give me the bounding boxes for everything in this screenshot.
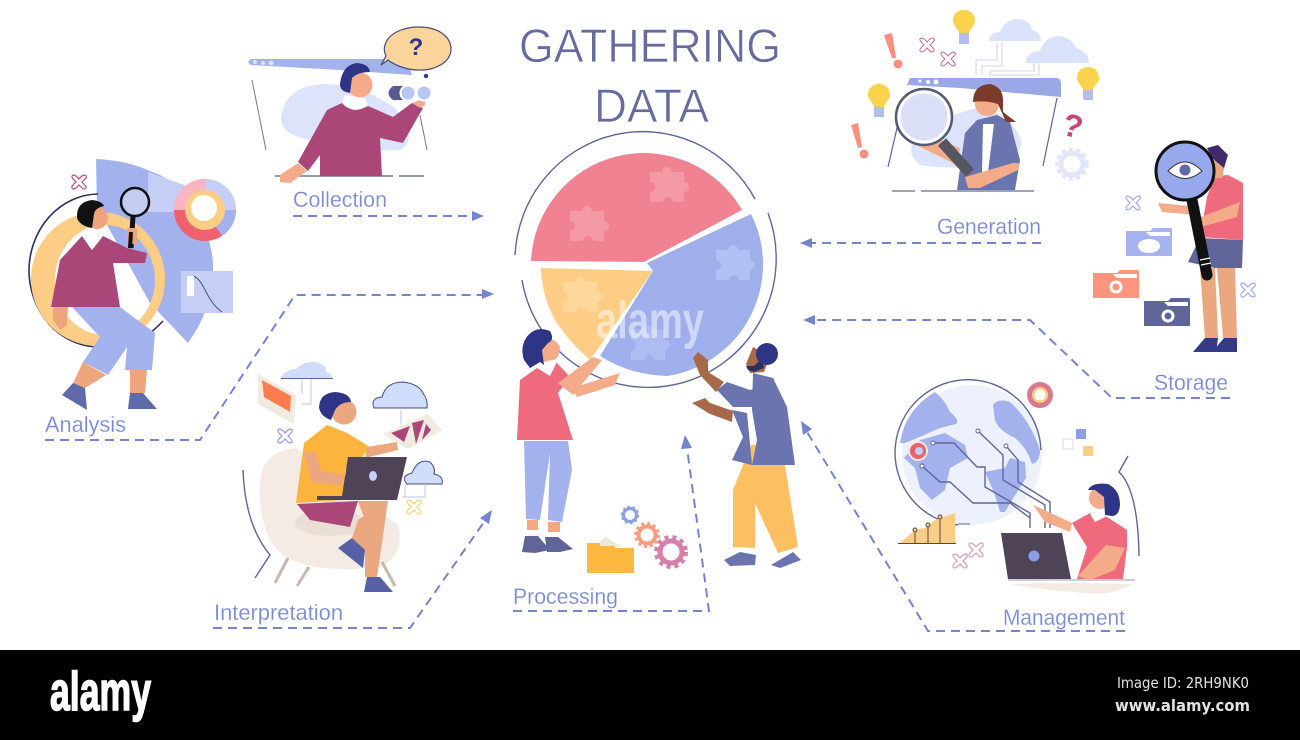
label: Analysis: Analysis xyxy=(45,412,126,437)
label: Collection: Collection xyxy=(293,187,387,212)
watermark: alamy xyxy=(596,292,704,350)
trousers xyxy=(733,443,798,553)
donut xyxy=(174,179,236,241)
ring outline xyxy=(29,194,163,347)
pie slice: red xyxy=(531,153,742,262)
figure: woman holding pie xyxy=(517,329,620,553)
panel: storage xyxy=(1093,142,1255,352)
lightbulbs xyxy=(868,10,1099,117)
puzzle pieces xyxy=(563,167,755,360)
clouds xyxy=(989,19,1041,41)
title xyxy=(519,19,781,132)
title: GATHERING xyxy=(519,19,781,72)
t-shirt xyxy=(296,425,370,503)
legs xyxy=(1200,268,1237,338)
arrow: Analysis xyxy=(45,289,494,440)
head xyxy=(332,400,356,424)
small chart panel xyxy=(181,271,233,313)
label: Generation: Generation xyxy=(937,214,1041,239)
jacket sleeve xyxy=(717,382,775,407)
head xyxy=(536,337,560,362)
floating maps xyxy=(258,374,296,424)
jacket left panel xyxy=(732,410,752,465)
figure: man holding pie xyxy=(692,343,801,568)
footer url: www.alamy.com xyxy=(1115,696,1250,715)
label: Processing: Processing xyxy=(513,584,618,609)
panel: collection: ? xyxy=(409,34,423,61)
table xyxy=(1008,579,1135,581)
browser bar xyxy=(248,59,412,75)
title: DATA xyxy=(594,79,710,132)
arrow: Interpretation xyxy=(213,510,492,628)
legs xyxy=(73,362,147,393)
squares xyxy=(1076,429,1086,439)
binoculars xyxy=(388,86,408,100)
footer band xyxy=(0,650,1300,740)
jacket right panel xyxy=(752,373,795,465)
blob xyxy=(281,84,409,150)
label: Storage: Storage xyxy=(1154,370,1228,395)
armchair xyxy=(260,448,400,569)
magnifier xyxy=(1192,200,1207,275)
arms xyxy=(558,357,602,395)
sweater xyxy=(51,236,147,307)
panel: analysis xyxy=(29,159,236,410)
folders xyxy=(1126,228,1172,256)
icons: processing folder and gears xyxy=(587,507,686,573)
shoes and legs xyxy=(352,510,372,550)
shorts xyxy=(1188,238,1243,268)
exclamation marks xyxy=(851,33,896,148)
laptop xyxy=(317,457,407,500)
pie slice: yellow xyxy=(541,268,653,360)
pie slice: blue xyxy=(600,214,763,376)
trousers xyxy=(524,441,572,522)
panel: generation xyxy=(851,10,1099,191)
donuts xyxy=(909,442,927,460)
panel: interpretation xyxy=(243,362,442,592)
gear xyxy=(1061,153,1083,175)
label: Management: Management xyxy=(1003,605,1125,630)
magnifier xyxy=(896,89,952,145)
shirt xyxy=(1200,175,1243,240)
bracket line xyxy=(1119,456,1139,556)
arms xyxy=(693,352,724,392)
data sector xyxy=(96,159,213,343)
person xyxy=(298,103,423,176)
yellow ring xyxy=(31,212,165,346)
woman xyxy=(1033,505,1072,532)
footer logo: alamy xyxy=(50,660,151,722)
shirt xyxy=(746,400,758,445)
circuit lines xyxy=(922,431,1050,528)
globe xyxy=(902,385,1042,525)
skirt xyxy=(297,501,358,527)
browser bar xyxy=(907,78,1061,97)
panel: collection xyxy=(248,27,451,183)
magnifier xyxy=(121,188,149,216)
arrow: Storage xyxy=(803,315,1230,398)
continents xyxy=(900,392,957,443)
blob xyxy=(911,109,1021,168)
clouds xyxy=(281,362,332,378)
label: Interpretation: Interpretation xyxy=(214,600,343,625)
arrow: Collection xyxy=(293,211,484,221)
decor xyxy=(72,175,86,189)
person xyxy=(957,115,1020,190)
arrow: Generation xyxy=(800,238,1041,248)
bar chart xyxy=(898,513,956,544)
arrow: Processing xyxy=(513,435,709,611)
head xyxy=(746,347,770,373)
laptop xyxy=(1001,533,1071,579)
question mark: ? xyxy=(1059,106,1087,146)
arrow: Management xyxy=(801,421,1125,631)
head xyxy=(1210,160,1226,178)
shirt xyxy=(517,363,573,440)
footer image id: Image ID: 2RH9NK0 xyxy=(1117,674,1249,692)
central pie chart with ring xyxy=(515,132,776,387)
panel: management xyxy=(895,380,1139,594)
speech bubble xyxy=(381,27,451,70)
